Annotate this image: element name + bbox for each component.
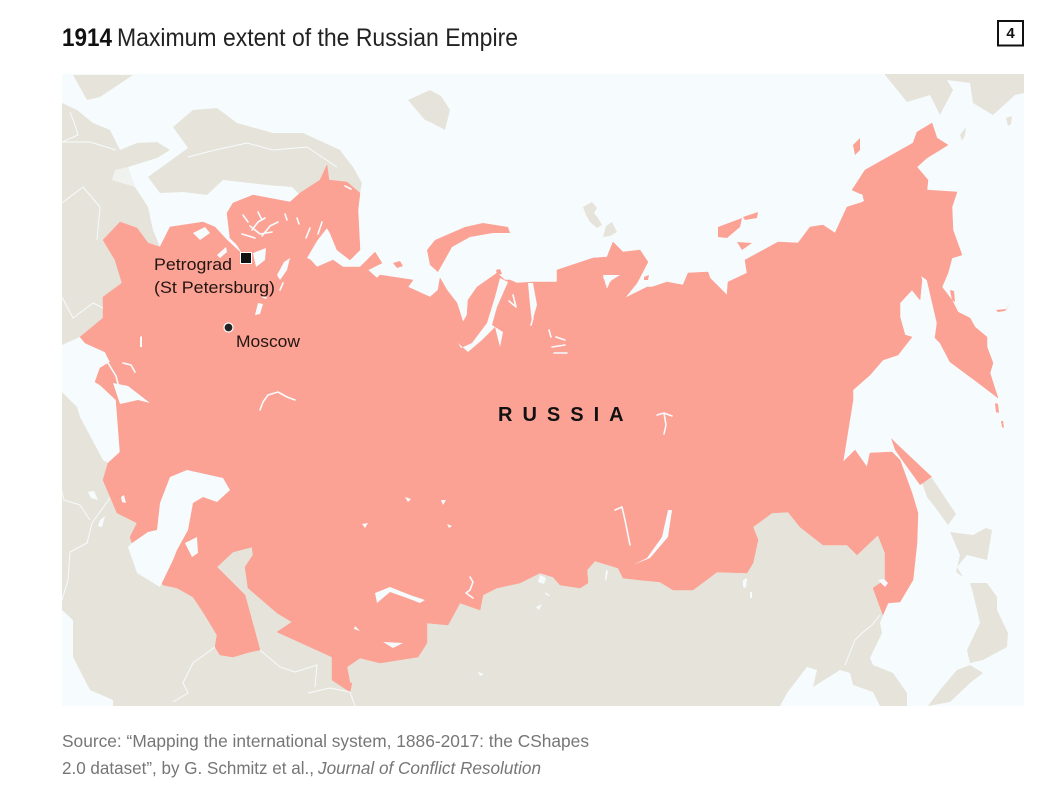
map [62,74,1024,706]
marker: Moscow [224,323,233,332]
title: Maximum extent of the Russian Empire [117,24,518,52]
sea: Red Sea side and Yellow Sea [62,167,880,706]
rivers and small lakes [108,186,672,598]
label: Petrograd: (St Petersburg) [154,278,275,297]
marker: Petrograd [240,252,252,264]
label: RUSSIA: RUSSIA [498,404,634,426]
source note: Journal of Conflict Resolution [317,758,541,778]
land: surrounding countries [62,74,1024,706]
lakes outside Russia [88,491,105,527]
label: Petrograd: Petrograd [154,255,232,274]
title: 1914 [62,24,112,52]
water: Caspian, Aral and inland seas [113,194,888,676]
page number badge [998,21,1023,46]
territory of the Russian Empire [80,123,998,692]
page number badge: 4 [1006,25,1015,42]
label: Petrograd [154,255,275,297]
source note: Source: “Mapping the international system, 1886-2017: the CShapes [62,731,589,751]
Russian islands [393,138,1010,485]
source note: 2.0 dataset”, by G. Schmitz et al., [62,758,314,778]
borders between countries [62,112,880,706]
label: Moscow: Moscow [236,332,301,351]
source note [62,731,589,778]
